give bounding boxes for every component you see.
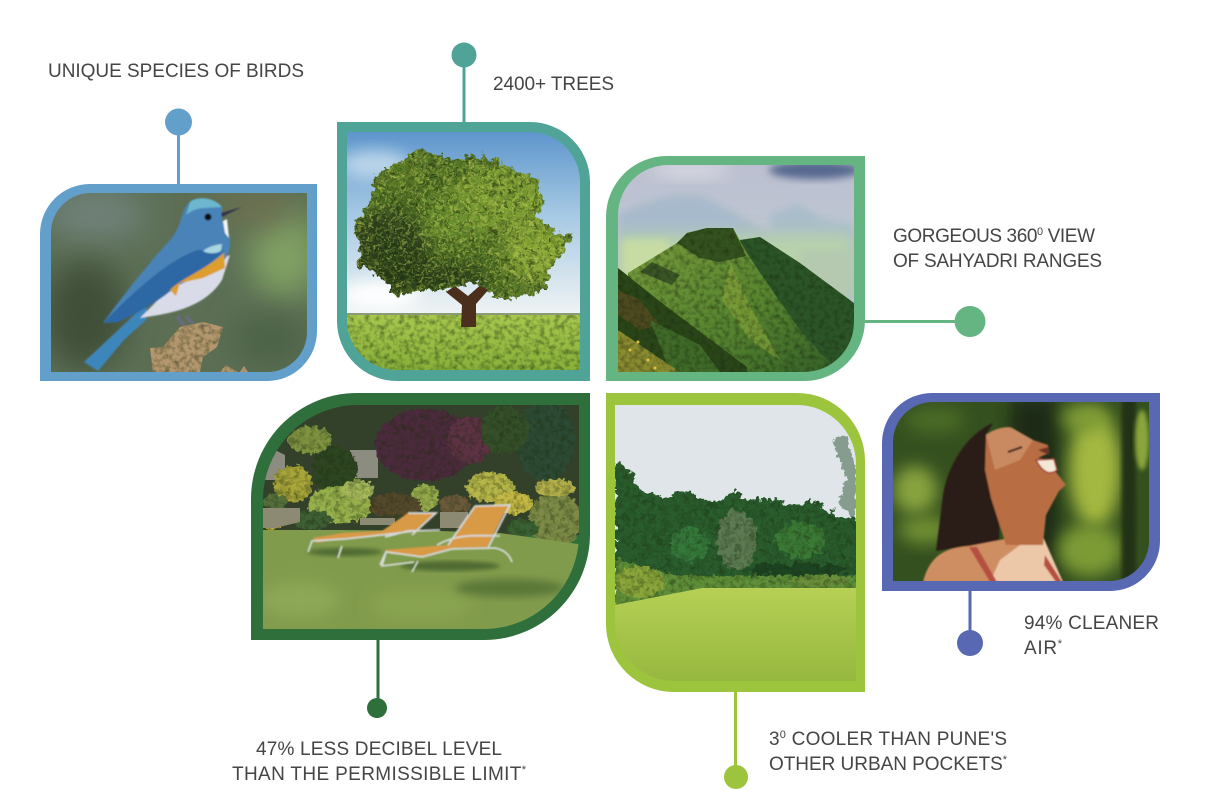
label: other urban pockets: *: [1003, 754, 1008, 766]
photo: garden with orange loungers: [255, 400, 585, 635]
panel: woman breathing photo: [882, 393, 1160, 591]
perch: [150, 322, 248, 372]
photo: blue bird on a perch: [51, 193, 307, 372]
connector: cooler: [724, 690, 748, 789]
label: than the permissible limit: *: [522, 764, 527, 776]
panel: mountain photo: [606, 156, 865, 381]
photo: Sahyadri mountain peaks: [610, 160, 861, 375]
connector: birds: [165, 108, 192, 186]
label: than the permissible limit: THAN THE PERMISSIBLE LIMIT: [232, 764, 521, 785]
label: unique species of birds: UNIQUE SPECIES OF BIRDS: [48, 61, 304, 82]
label: 47% less decibel level: 47% LESS DECIBEL LEVEL: [256, 739, 502, 760]
photo: lone oak tree in a field: [340, 128, 585, 374]
panel: bird photo: [40, 183, 321, 384]
photo: woman smiling up in forest: [893, 402, 1149, 581]
label: air: AIR: [1024, 638, 1057, 659]
connector: decibel level: [367, 638, 387, 718]
label: air: *: [1058, 638, 1063, 650]
label: 2400+ trees: 2400+ TREES: [493, 74, 614, 95]
label: gorgeous 360 degree view: GORGEOUS 360: [893, 226, 1037, 247]
label: 3 degrees cooler than Pune's: 3: [769, 729, 780, 750]
label: of Sahyadri ranges: OF SAHYADRI RANGES: [893, 251, 1102, 272]
label: other urban pockets: OTHER URBAN POCKETS: [769, 754, 1003, 775]
connector: cleaner air: [957, 589, 983, 656]
label: gorgeous 360 degree view: 0: [1037, 226, 1043, 238]
label: gorgeous 360 degree view: VIEW: [1043, 226, 1095, 247]
panel: tree photo: [337, 122, 590, 381]
label: 3 degrees cooler than Pune's: 0: [780, 729, 786, 741]
connector: trees: [452, 42, 476, 124]
label: 94% cleaner: 94% CLEANER: [1024, 613, 1159, 634]
panel: lawn photo: [606, 393, 865, 692]
connector: view: [863, 306, 986, 337]
photo: green lawn with tree line: [610, 400, 860, 690]
label: 3 degrees cooler than Pune's: COOLER THAN PUNE'S: [786, 729, 1007, 750]
panel: garden photo: [251, 393, 590, 640]
